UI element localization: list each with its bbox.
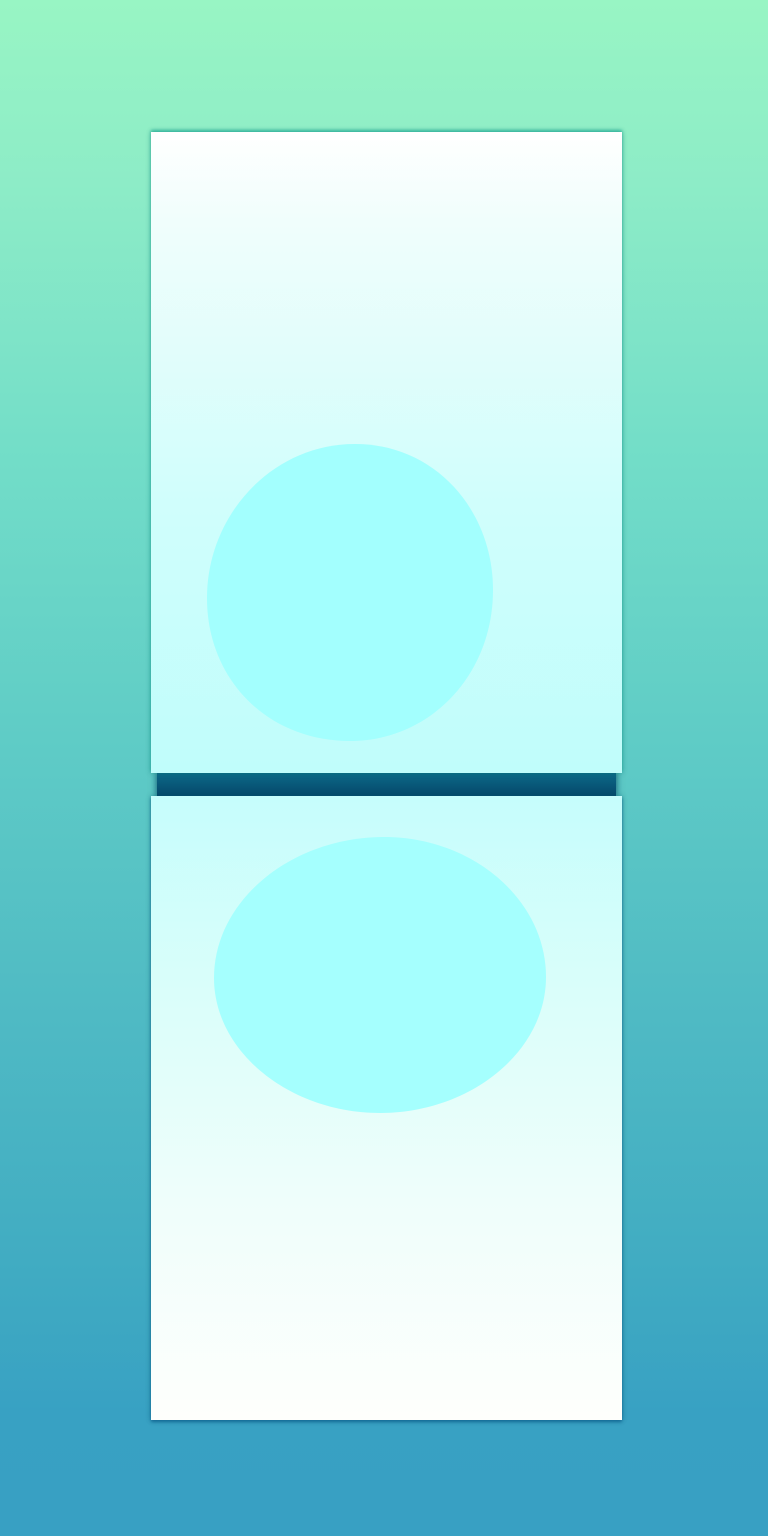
dark gap strip between panels [157,773,616,796]
panel: bottom card [151,796,622,1420]
panel: top card [151,132,622,773]
shape: bottom card ellipse [214,837,546,1113]
shape: top card blob [207,444,493,741]
